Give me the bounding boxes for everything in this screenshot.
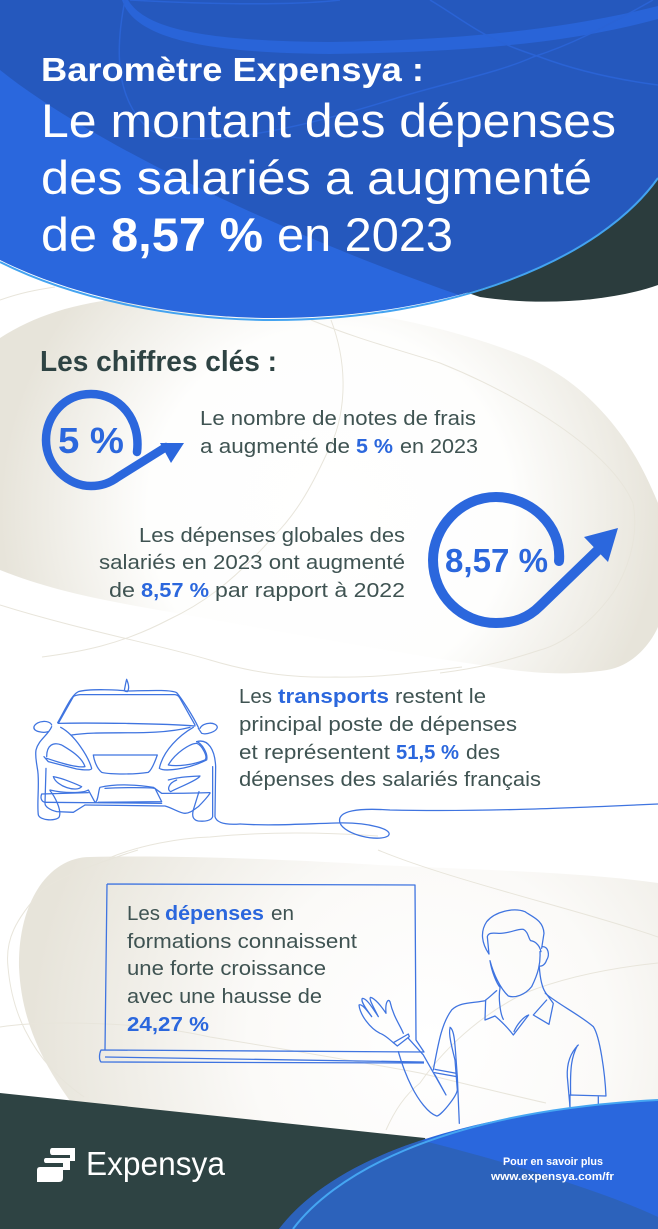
- text: global expenses: salariés en 2023 ont augmenté: [99, 551, 405, 574]
- footer link: Pour en savoir plus: [503, 1156, 603, 1168]
- title: en 2023: [277, 208, 453, 261]
- panel: beige background training: [19, 857, 658, 1140]
- text: training: en: [271, 902, 294, 925]
- title: Baromètre Expensya :: [41, 51, 424, 88]
- footer link: [490, 1156, 615, 1183]
- text: number of expense reports: [200, 407, 478, 458]
- panel: beige background key figures: [0, 296, 658, 673]
- text: global expenses: de: [109, 579, 135, 602]
- text: transports: restent le: [395, 685, 486, 708]
- text: global expenses: par rapport à 2022: [215, 579, 405, 602]
- logo wordmark: Expensya: [86, 1145, 226, 1182]
- icon: 5 % circular arrow: [46, 394, 184, 486]
- text: number of expense reports: a augmenté de: [200, 435, 350, 458]
- text: transports: dépenses des salariés français: [239, 768, 541, 791]
- title: de: [41, 208, 97, 261]
- text: training: [127, 902, 357, 1036]
- text: global expenses: [99, 524, 405, 602]
- car trailing line: [240, 804, 658, 838]
- text: transports: 51,5 %: [396, 741, 459, 764]
- text: number of expense reports: 5 %: [356, 435, 393, 458]
- illustration: car line drawing: [34, 679, 240, 824]
- title: [41, 51, 616, 261]
- text: global expenses: Les dépenses globales des: [139, 524, 405, 547]
- text: training: 24,27 %: [127, 1013, 209, 1036]
- text: training: une forte croissance: [127, 957, 326, 980]
- footer dark band: [0, 1093, 460, 1229]
- darker blue band: [0, 0, 658, 300]
- header banner: [0, 0, 658, 320]
- heading: key figures: Les chiffres clés :: [40, 346, 277, 378]
- icon: 5 % circular arrow: 5 %: [58, 420, 124, 461]
- dark header corner: [430, 170, 658, 302]
- title: Le montant des dépenses: [41, 94, 616, 147]
- illustration: whiteboard: [100, 884, 424, 1063]
- header decorative ribbon: [122, 0, 658, 54]
- text: training: dépenses: [165, 902, 264, 925]
- text: transports: [239, 685, 541, 791]
- text: transports: transports: [278, 685, 389, 708]
- title: 8,57 %: [111, 208, 263, 261]
- text: transports: des: [466, 741, 500, 764]
- text: number of expense reports: Le nombre de notes de frais: [200, 407, 476, 430]
- text: training: avec une hausse de: [127, 985, 322, 1008]
- text: transports: et représentent: [239, 741, 390, 764]
- text: training: Les: [127, 902, 160, 925]
- illustration: presenter line drawing: [359, 910, 606, 1123]
- icon: 8,57 % circular arrow: [433, 497, 618, 623]
- icon: Expensya logo: [37, 1148, 75, 1182]
- text: transports: Les: [239, 685, 272, 708]
- title: des salariés a augmenté: [41, 151, 592, 204]
- text: transports: principal poste de dépenses: [239, 713, 517, 736]
- footer blue shape: [270, 1100, 658, 1229]
- text: global expenses: 8,57 %: [141, 579, 209, 602]
- text: training: formations connaissent: [127, 930, 357, 953]
- footer link: www.expensya.com/fr: [490, 1171, 615, 1183]
- text: number of expense reports: en 2023: [400, 435, 478, 458]
- decorative thin lines: [0, 287, 658, 1130]
- icon: 8,57 % circular arrow: 8,57 %: [445, 542, 548, 579]
